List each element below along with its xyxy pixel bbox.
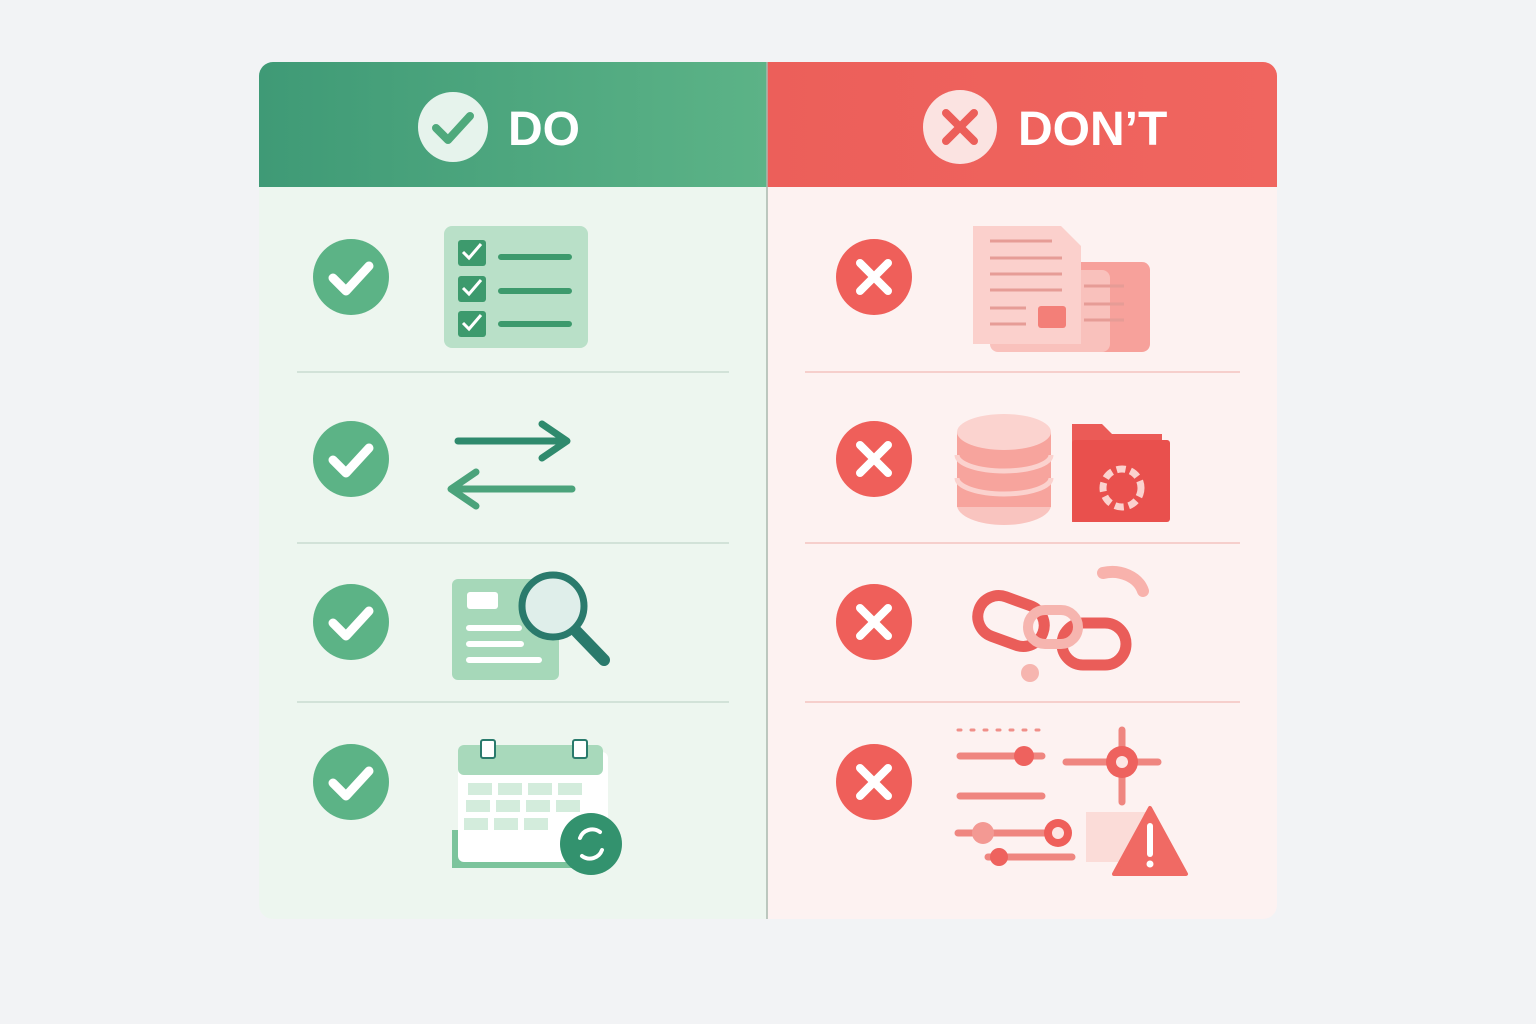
icon: duplicate documents: [973, 226, 1150, 352]
icon: checklist: [444, 226, 588, 348]
header: DON'T: [767, 62, 1277, 187]
icon: exchange arrows: [451, 424, 572, 506]
icon: broken chain: [972, 572, 1143, 682]
icon: database and folder: [957, 414, 1170, 525]
icon: calendar sync: [452, 740, 622, 875]
icon: settings sliders warning: [958, 730, 1186, 874]
icon: document search: [452, 575, 604, 680]
header: DO: DO: [508, 103, 580, 156]
header: DON'T: DON’T: [1018, 103, 1167, 156]
header: DO: [259, 62, 767, 187]
card: [259, 62, 1277, 919]
check icons: [313, 239, 389, 820]
x icons: [836, 239, 912, 820]
